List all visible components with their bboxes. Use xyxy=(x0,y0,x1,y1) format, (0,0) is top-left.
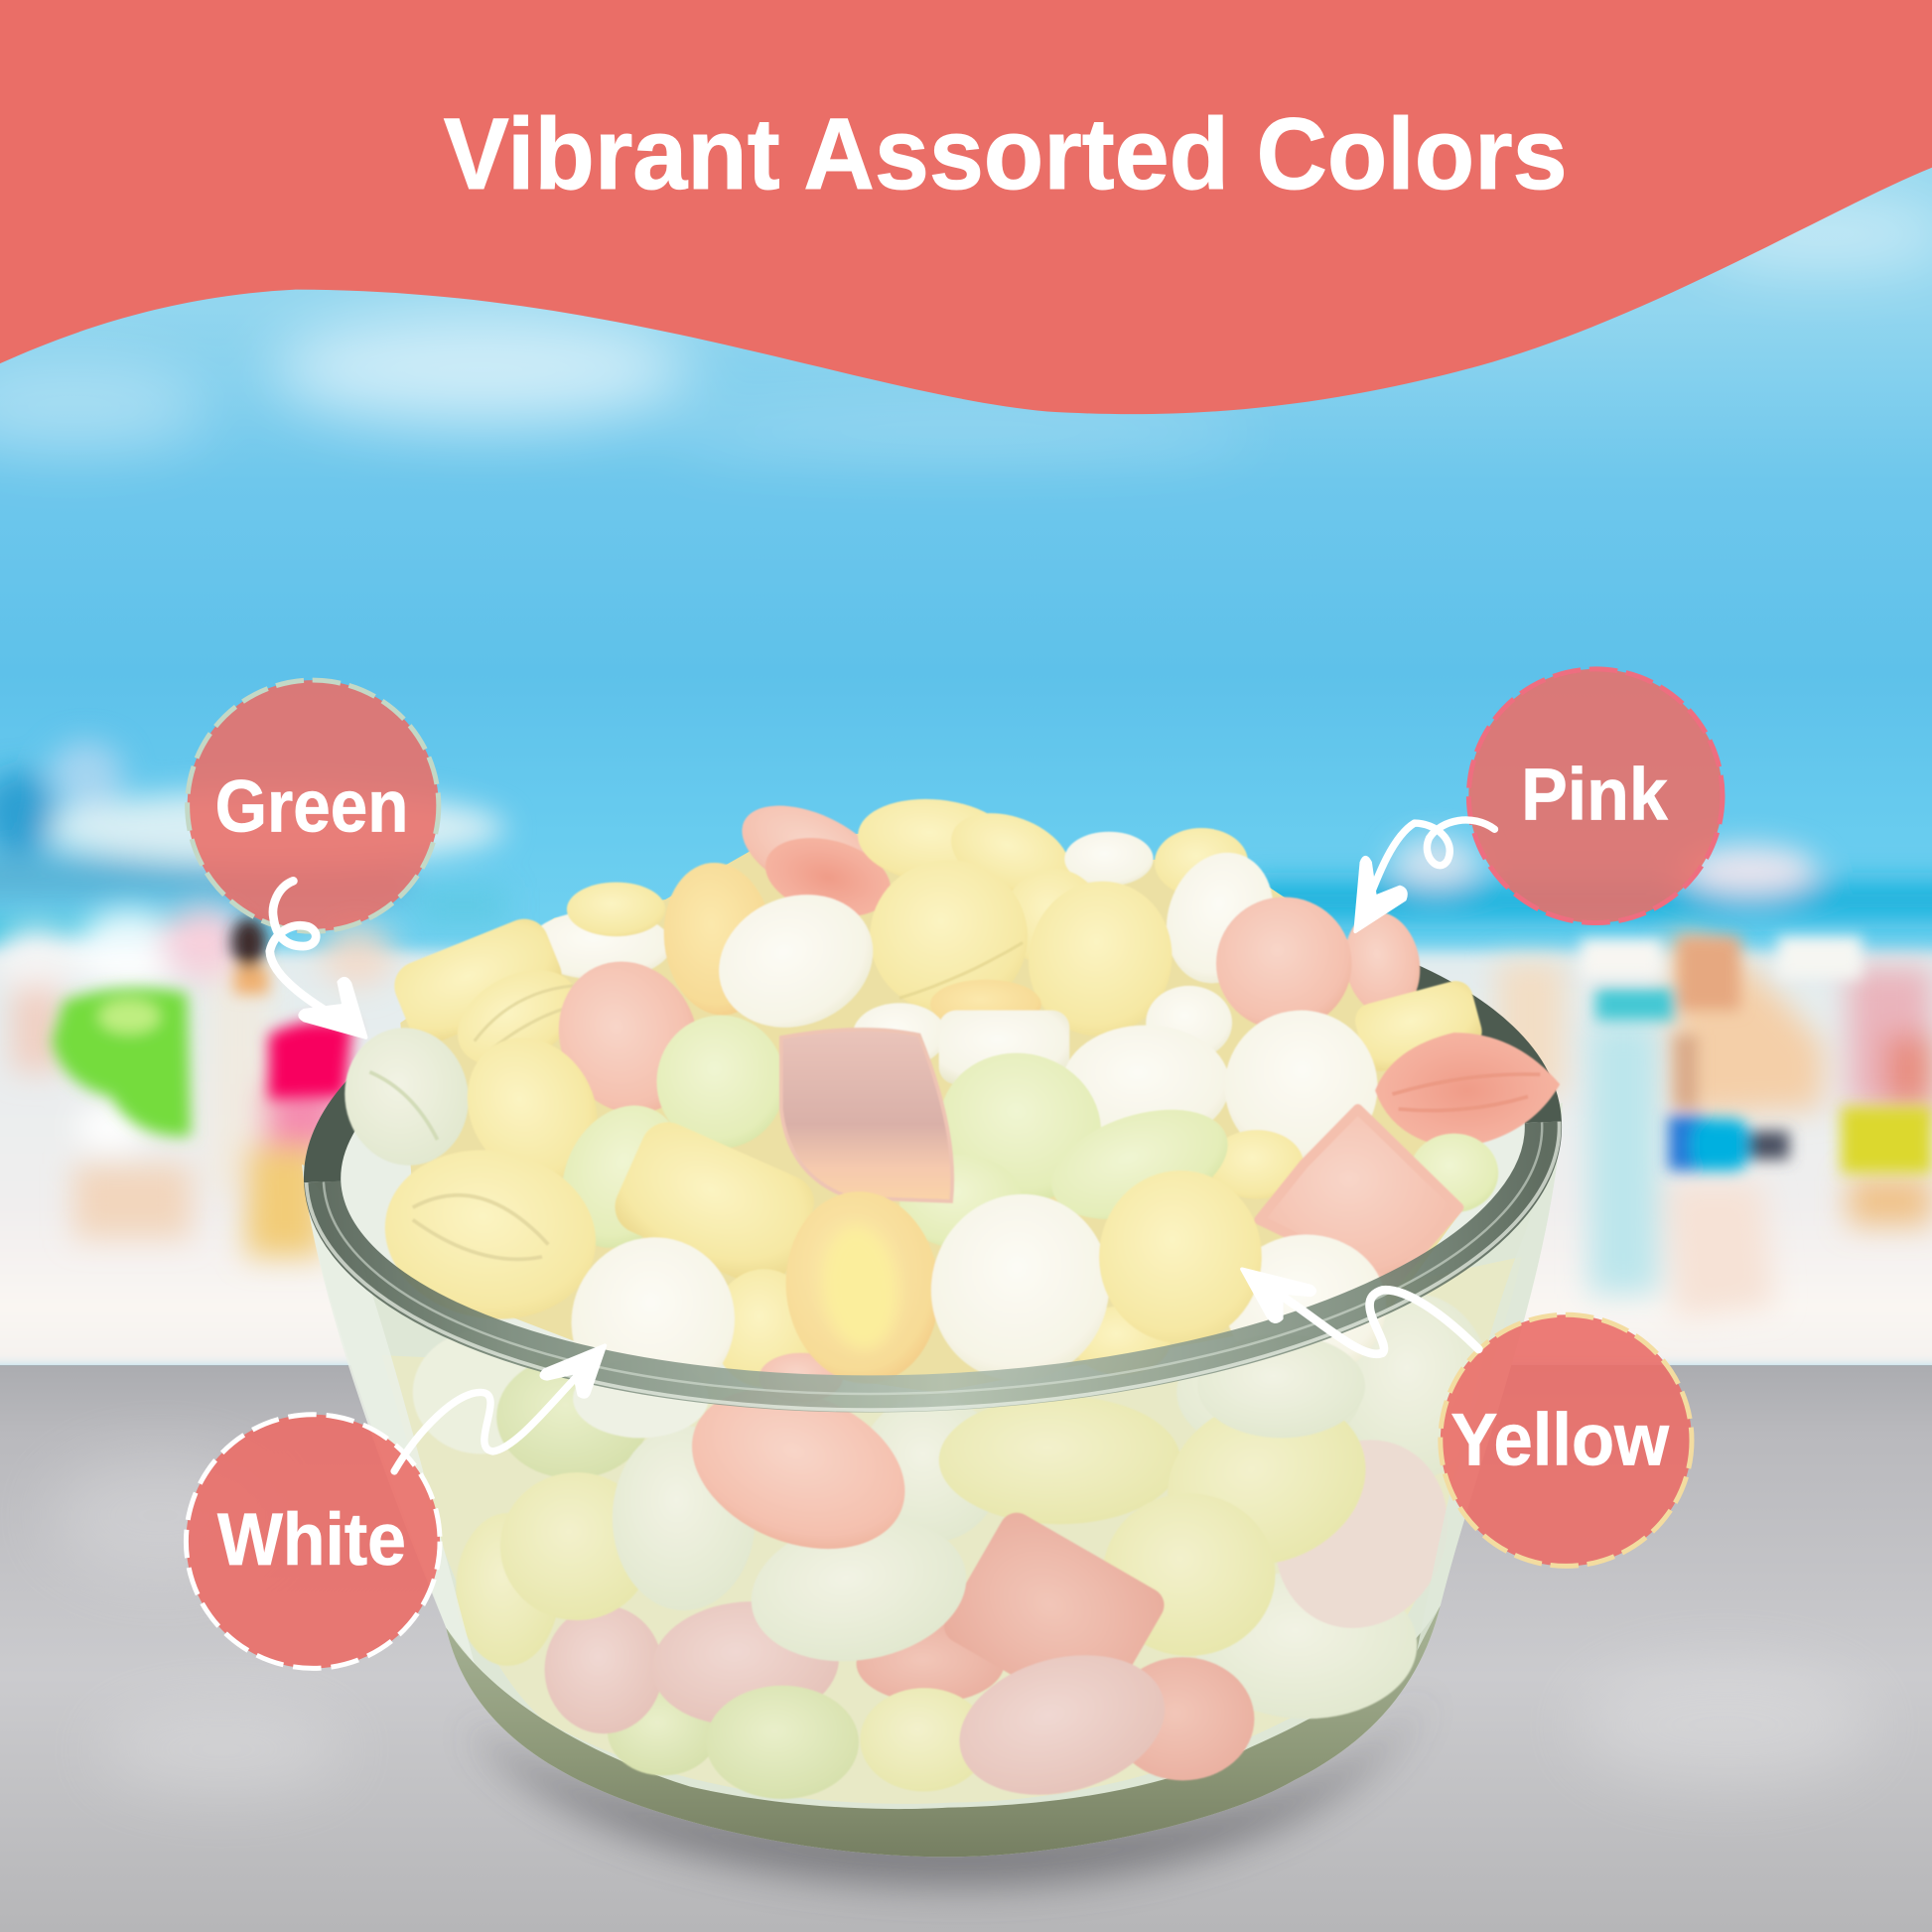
clouds xyxy=(0,200,1932,456)
glass wall haze xyxy=(302,1165,475,1663)
callout: yellow xyxy=(1441,1314,1692,1566)
lower marshmallows behind glass xyxy=(413,1294,1491,1817)
background: blurred beach scene xyxy=(0,167,1932,1365)
lower marshmallow filler xyxy=(382,1257,1522,1804)
arrow: white xyxy=(394,1345,605,1471)
bowl shadow xyxy=(469,1688,1436,1885)
title: Vibrant Assorted Colors xyxy=(444,97,1568,210)
distant boats and sea xyxy=(0,742,1932,946)
crowd right xyxy=(1497,935,1932,1318)
marshmallow filler xyxy=(400,826,1491,1392)
glass bowl with marshmallows xyxy=(302,786,1572,1857)
callout: green: Green xyxy=(215,765,408,848)
table top xyxy=(0,1365,1932,1932)
crowd left xyxy=(0,905,394,1257)
sand xyxy=(0,951,1932,1370)
arrow: pink xyxy=(1355,820,1494,931)
front rim of bowl xyxy=(307,1122,1572,1439)
table mottling xyxy=(50,1453,1872,1793)
callout: white: White xyxy=(217,1498,406,1581)
bowl body xyxy=(302,1103,1563,1857)
callout: pink xyxy=(1468,669,1723,923)
callout: pink: Pink xyxy=(1521,753,1668,835)
bowl base thick glass xyxy=(446,1605,1441,1857)
back rim of bowl xyxy=(314,944,1555,1422)
callout: green xyxy=(188,680,439,931)
callout: white xyxy=(186,1415,440,1668)
arrow: yellow xyxy=(1242,1269,1478,1354)
banner xyxy=(0,0,1932,414)
arrow: green xyxy=(270,881,366,1037)
upper marshmallows xyxy=(334,786,1560,1438)
callout: yellow: Yellow xyxy=(1450,1399,1670,1481)
